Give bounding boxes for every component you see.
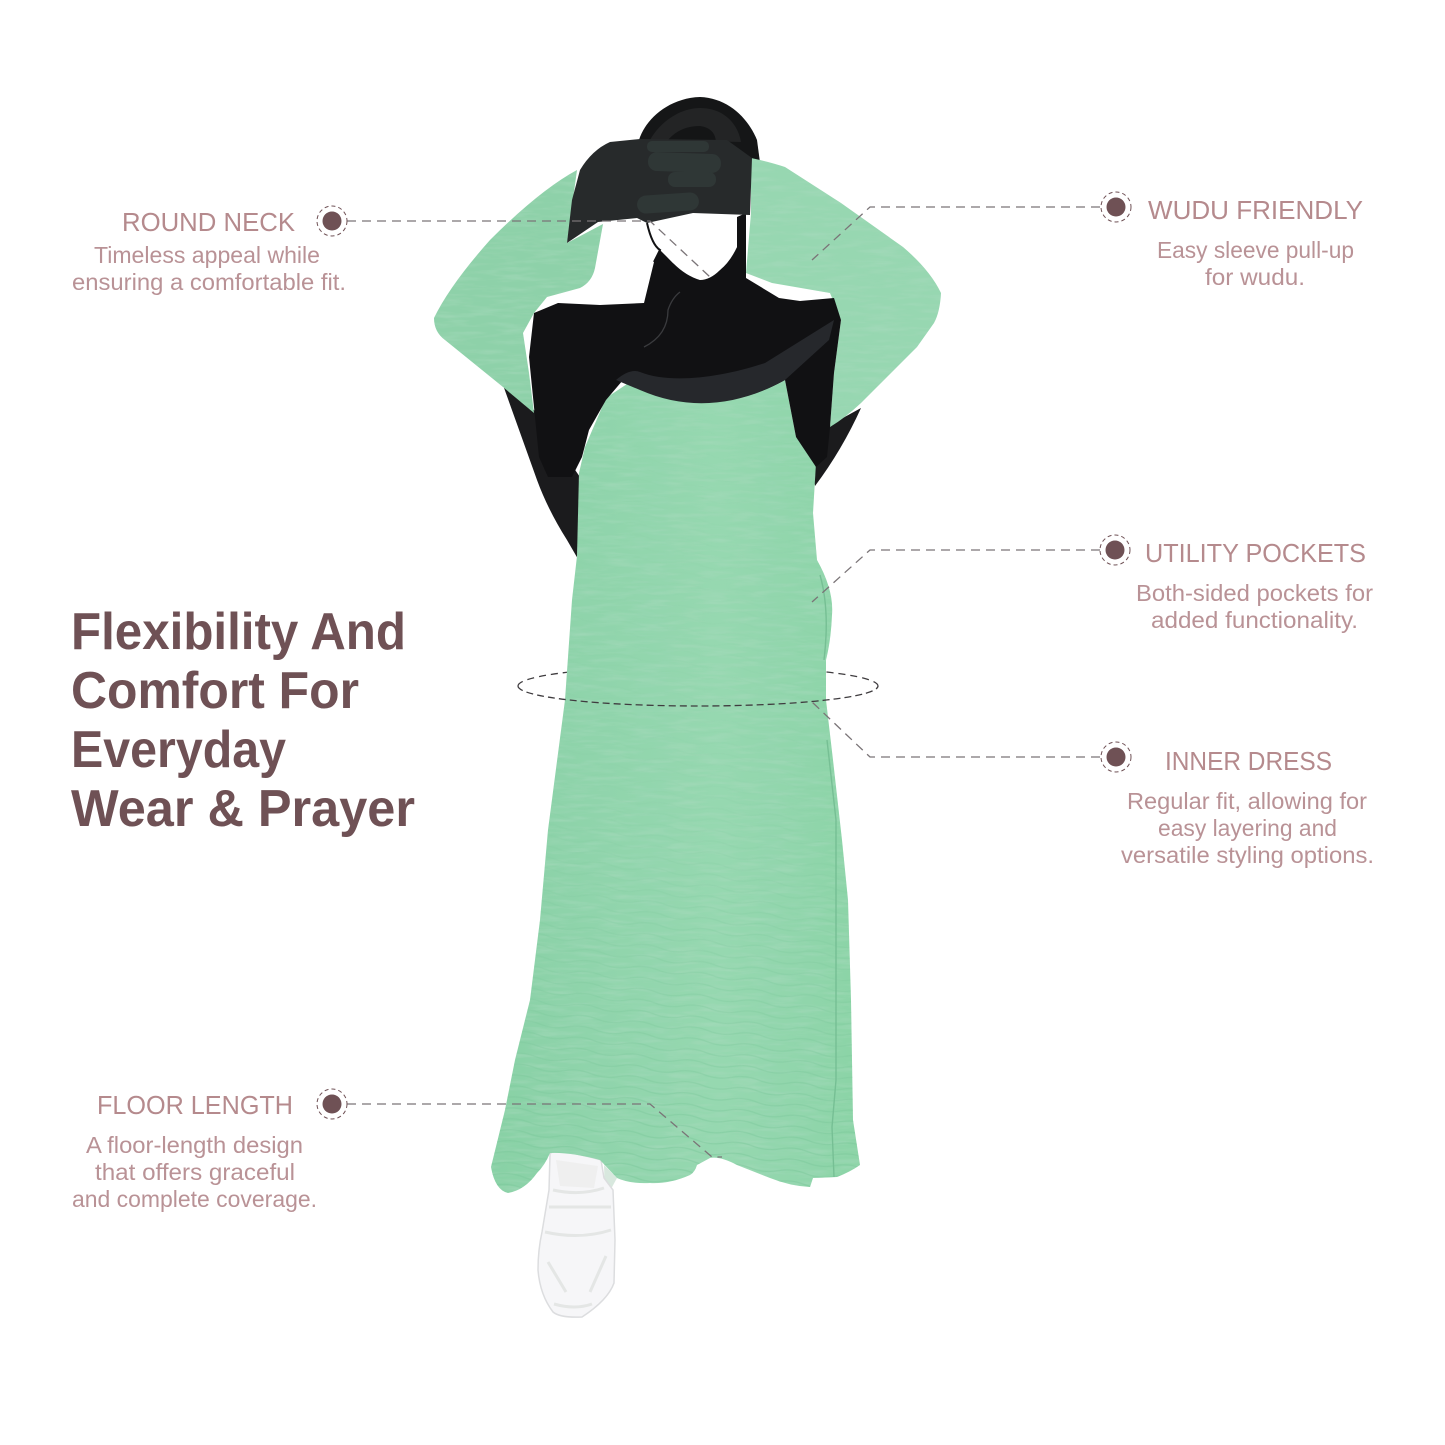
callout text: utility pockets: Both-sided pockets for (1136, 580, 1373, 606)
callout text: round neck: ROUND NECK (122, 207, 296, 237)
callout text: inner dress: INNER DRESS (1165, 746, 1332, 776)
wavy crinkle texture on skirt (492, 922, 859, 1188)
white face opening (650, 215, 737, 280)
green dress skirt and bodice (491, 380, 860, 1193)
callout text: floor length: that offers graceful (95, 1159, 295, 1185)
title: Comfort For (71, 662, 359, 720)
marker: utility pockets (1100, 535, 1130, 565)
left sleeve (434, 170, 603, 413)
callout lines (347, 207, 1100, 1157)
callout text: floor length: and complete coverage. (72, 1186, 317, 1212)
marker: round neck (317, 206, 347, 236)
shawl lighter edge band (616, 320, 834, 403)
callout text: round neck: Timeless appeal while (94, 242, 320, 268)
dress side fold and pocket (820, 575, 836, 1177)
shawl cord (644, 292, 680, 347)
title: Everyday (71, 721, 286, 779)
title: Wear & Prayer (71, 780, 415, 838)
black shawl and neck (529, 213, 841, 477)
callout text: utility pockets (1136, 538, 1373, 633)
callout text: wudu friendly: for wudu. (1205, 264, 1305, 290)
callout text: wudu friendly: Easy sleeve pull-up (1157, 237, 1354, 263)
title: Flexibility And (71, 603, 406, 661)
callout text: inner dress: easy layering and (1158, 815, 1337, 841)
face strap (647, 223, 660, 262)
back wings of black shawl (503, 385, 861, 559)
title (71, 603, 415, 838)
callout text: floor length (72, 1090, 317, 1212)
callout text: round neck: ensuring a comfortable fit. (72, 269, 346, 295)
marker: wudu friendly (1101, 192, 1131, 222)
waist ellipse front arc (518, 686, 878, 706)
glove fingers (636, 141, 721, 214)
waist ellipse back arc (518, 666, 878, 686)
marker: floor length (317, 1089, 347, 1119)
callout text: inner dress: versatile styling options. (1121, 842, 1374, 868)
callout text: utility pockets: UTILITY POCKETS (1145, 538, 1366, 568)
shoe (538, 1147, 617, 1317)
callout text: wudu friendly (1148, 195, 1363, 290)
callout text: inner dress (1121, 746, 1374, 868)
right sleeve (746, 158, 941, 427)
callout text: floor length: FLOOR LENGTH (97, 1090, 293, 1120)
figure: model in green dress and black prayer shawl (434, 97, 941, 1317)
callout text: floor length: A floor-length design (86, 1132, 303, 1158)
callout text: inner dress: Regular fit, allowing for (1127, 788, 1367, 814)
gloves over forehead (567, 139, 752, 243)
callout text: utility pockets: added functionality. (1151, 607, 1358, 633)
callout text: round neck (72, 207, 346, 295)
callout text: wudu friendly: WUDU FRIENDLY (1148, 195, 1363, 225)
marker: inner dress (1101, 742, 1131, 772)
hood (639, 97, 761, 170)
